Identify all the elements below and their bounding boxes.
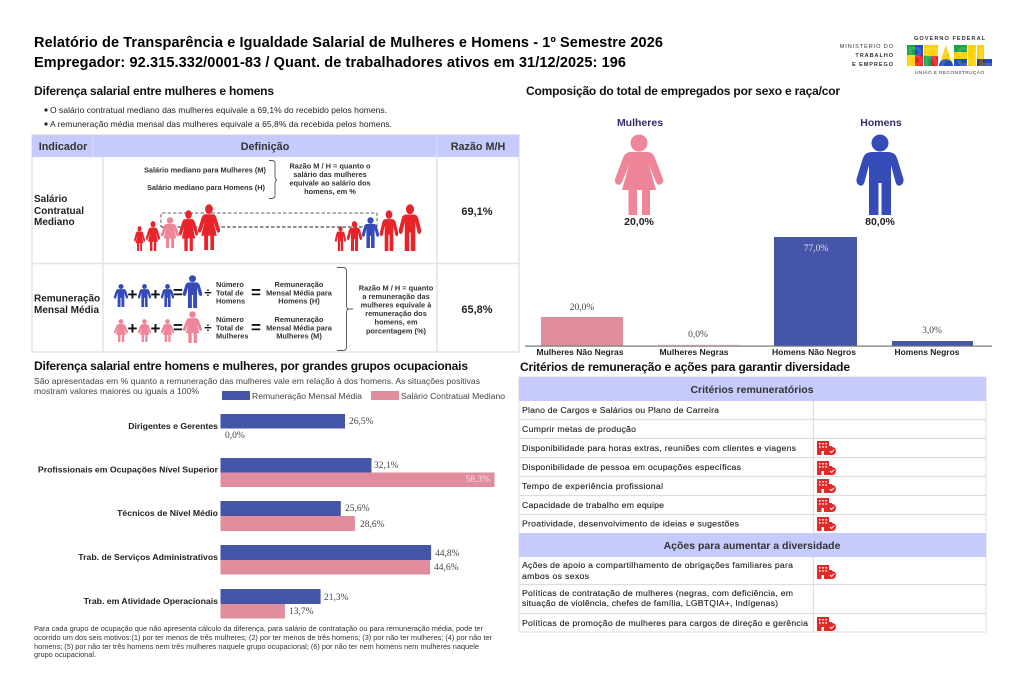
icon: mulheres: [615, 117, 663, 228]
section header: Ações para aumentar a diversidade: [664, 540, 841, 552]
dashed median box: [161, 213, 377, 227]
rows: [522, 405, 797, 528]
rows: Políticas de promoção de mulheres para cargos de direção e gerência: [522, 618, 808, 628]
bar chart: grupos ocupacionais: 25,6%: [345, 504, 370, 514]
formula: homens: Homens: [216, 296, 245, 306]
formula: homens: =: [173, 283, 183, 302]
logo: governo federal brasil: BRASIL: [907, 41, 992, 72]
formula: homens: Mensal Média para: [266, 288, 333, 298]
bar chart: composição: 0,0%: [688, 330, 708, 340]
definition: razão remuneração: homens, em: [374, 318, 418, 326]
formula: homens: =: [251, 283, 261, 302]
title: Relatório de Transparência e Igualdade Salarial de Mulheres e Homens - 1º Semestre 2026: [34, 35, 663, 51]
icon: homens: [856, 117, 904, 228]
formula: mulheres: ÷: [204, 320, 212, 335]
definition: razão remuneração: mulheres equivale à: [361, 300, 432, 310]
logo: ministry: TRABALHO: [855, 53, 894, 59]
heading: grupos ocupacionais: Diferença salarial entre homens e mulheres, por grandes grupos ocupacionais: [34, 359, 468, 373]
legend: [222, 391, 505, 401]
formula: homens: ÷: [204, 285, 212, 300]
rows: ambos os sexos: [522, 571, 590, 581]
footnote: grupo ocupacional.: [34, 650, 96, 659]
section header: Critérios remuneratórios: [690, 384, 814, 396]
footnote: homens; (5) por não ter três homens nem três mulheres naquele grupo ocupacional; (6) por não ter nem homens nem mulheres naquele: [34, 642, 479, 651]
bar chart: grupos ocupacionais: 28,6%: [360, 520, 385, 530]
formula: mulheres: Mulheres: [216, 332, 248, 340]
bar chart: grupos ocupacionais: 58,3%: [465, 475, 490, 485]
legend: Remuneração Mensal Média: [252, 391, 362, 401]
bullets: [44, 105, 392, 129]
indicator: remuneração: Remuneração: [34, 294, 100, 304]
bar chart: composição: 77,0%: [804, 244, 828, 254]
table header: Indicador: [39, 141, 88, 153]
footnote: Para cada grupo de ocupação que não apresenta cálculo da diferença, para salário de contratação ou para remuneração média, pode ter: [34, 624, 484, 633]
bullets: O salário contratual mediano das mulheres equivale a 69,1% do recebido pelos homens.: [50, 105, 387, 115]
bar chart: grupos ocupacionais: 21,3%: [324, 593, 349, 603]
bar chart: grupos ocupacionais: 44,8%: [435, 549, 460, 559]
logo: governo federal brasil: UNIÃO E RECONSTRUÇÃO: [915, 69, 985, 76]
formula: mulheres: =: [173, 318, 183, 337]
value: 65,8%: 65,8%: [461, 304, 493, 316]
indicator: salário contratual: Mediano: [34, 217, 75, 228]
definition: razão remuneração: [359, 284, 434, 336]
bar chart: composição: [525, 237, 992, 357]
definition: razão salário: salário das mulheres: [293, 170, 367, 179]
subtitle: [34, 376, 480, 396]
definition: razão salário: [289, 162, 371, 196]
rows: Plano de Cargos e Salários ou Plano de Carreira: [522, 405, 719, 415]
bar chart: grupos ocupacionais: Técnicos de Nível Médio: [117, 508, 218, 518]
icons: homens mediana: [335, 204, 421, 251]
formula: mulheres: Mensal Média para: [266, 324, 333, 332]
indicator: salário contratual: Salário: [34, 194, 67, 205]
formula: homens: Total de: [216, 288, 244, 298]
bar chart: grupos ocupacionais: [38, 414, 494, 618]
formula: mulheres: +: [128, 319, 138, 338]
title: Empregador: 92.315.332/0001-83 / Quant. de trabalhadores ativos em 31/12/2025: 196: [34, 55, 626, 71]
definition text: salário mediano: Salário mediano para Mulheres (M): [144, 166, 267, 174]
bar chart: composição: Homens Negros: [894, 347, 960, 357]
brace: [337, 268, 353, 350]
footnote: [34, 624, 493, 659]
rows: Proatividade, desenvolvimento de ideias e sugestões: [522, 518, 740, 528]
icons: building check: [817, 441, 836, 531]
icon: mulheres: 20,0%: [624, 216, 655, 228]
icons: building check: [817, 565, 836, 631]
formula: homens: +: [128, 285, 138, 304]
formula: mulheres: Total de: [216, 324, 244, 332]
formula: mulheres: Número: [216, 315, 244, 324]
heading: critérios: Critérios de remuneração e ações para garantir diversidade: [520, 360, 850, 374]
definition: razão remuneração: Razão M / H = quanto: [359, 284, 434, 292]
bar chart: grupos ocupacionais: 0,0%: [225, 431, 245, 441]
footnote: ocorrido um dos seis motivos:(1) por ter menos de três mulheres; (2) por ter menos de três homens; (3) por não ter mulheres; (4) por não ter: [34, 633, 493, 642]
rows: Cumprir metas de produção: [522, 424, 636, 434]
definition: razão remuneração: remuneração dos: [365, 309, 427, 318]
rows: Disponibilidade para horas extras, reuniões com clientes e viagens: [522, 443, 797, 453]
legend: Salário Contratual Mediano: [401, 391, 505, 401]
icon: homens: 80,0%: [865, 216, 896, 228]
brace: [269, 160, 277, 198]
indicator: remuneração: [34, 294, 100, 316]
formula: homens: Homens (H): [278, 296, 320, 306]
rows: situação de violência, chefes de família, LGBTQIA+, Indígenas): [522, 598, 778, 608]
definition text: salário mediano: [144, 166, 267, 192]
bar chart: grupos ocupacionais: Dirigentes e Gerentes: [128, 421, 218, 431]
definition: razão salário: Razão M / H = quanto o: [289, 162, 371, 170]
value: 69,1%: 69,1%: [461, 206, 493, 218]
rows: Disponibilidade de pessoa em ocupações específicas: [522, 462, 742, 472]
icon: mulheres: Mulheres: [617, 117, 663, 129]
logo: governo federal brasil: [907, 36, 992, 76]
bar chart: composição: Mulheres Negras: [660, 347, 729, 357]
indicator: salário contratual: Contratual: [34, 206, 84, 217]
rows: [522, 560, 808, 628]
title: [34, 35, 663, 71]
icons: mulheres mediana: [134, 204, 220, 251]
table header: Definição: [241, 141, 290, 153]
definition: razão salário: homens, em %: [304, 187, 356, 196]
formula: mulheres: Mulheres (M): [276, 332, 322, 340]
logo: ministry: E EMPREGO: [852, 62, 894, 68]
rows: Tempo de experiência profissional: [522, 481, 663, 491]
heading: composição: Composição do total de empregados por sexo e raça/cor: [526, 84, 840, 98]
formula: mulheres: Remuneração: [275, 315, 324, 324]
bar chart: grupos ocupacionais: Trab. de Serviços Administrativos: [78, 552, 218, 562]
rows: Ações de apoio a compartilhamento de obrigações familiares para: [522, 560, 793, 570]
formula: homens: [114, 275, 333, 308]
bar chart: grupos ocupacionais: 32,1%: [374, 461, 399, 471]
logo: governo federal brasil: GOVERNO FEDERAL: [914, 36, 986, 42]
subtitle: mostram valores maiores ou iguais a 100%: [34, 386, 199, 396]
definition: razão salário: equivale ao salário dos: [289, 178, 371, 188]
heading: diferença salarial: Diferença salarial entre mulheres e homens: [34, 84, 274, 98]
logo: ministry: MINISTÉRIO DO: [840, 43, 894, 50]
formula: mulheres: [114, 311, 333, 343]
indicator: salário contratual: [34, 194, 84, 228]
bullets: A remuneração média mensal das mulheres equivale a 65,8% da recebida pelos homens.: [50, 119, 392, 129]
definition: razão remuneração: porcentagem (%): [366, 326, 427, 336]
rows: Capacidade de trabalho em equipe: [522, 500, 664, 510]
bar chart: composição: 20,0%: [570, 303, 594, 313]
formula: homens: Número: [216, 280, 244, 289]
definition text: salário mediano: Salário mediano para Homens (H): [147, 183, 266, 192]
table header: [32, 135, 519, 157]
rows: Políticas de contratação de mulheres (negras, com deficiência, em: [522, 588, 793, 598]
bar chart: composição: Homens Não Negros: [772, 347, 856, 357]
definition: razão remuneração: a remuneração das: [362, 292, 430, 301]
bar chart: grupos ocupacionais: 26,5%: [349, 417, 374, 427]
formula: mulheres: +: [151, 319, 161, 338]
formula: homens: Remuneração: [275, 280, 324, 289]
icon: homens: Homens: [860, 117, 902, 129]
bar chart: grupos ocupacionais: Profissionais em Ocupações Nível Superior: [38, 464, 219, 474]
bar chart: composição: 3,0%: [922, 326, 942, 336]
formula: homens: +: [151, 285, 161, 304]
bar chart: grupos ocupacionais: Trab. em Atividade Operacionais: [84, 596, 218, 606]
indicator: remuneração: Mensal Média: [34, 305, 99, 316]
subtitle: São apresentadas em % quanto a remuneração das mulheres vale em relação à dos homens. As situações positivas: [34, 376, 480, 386]
bar chart: grupos ocupacionais: 44,6%: [434, 563, 459, 573]
table header: Razão M/H: [451, 141, 505, 153]
panel: critérios remuneratórios e ações: [519, 377, 986, 632]
formula: mulheres: =: [251, 318, 261, 337]
panel: tabela indicadores: [32, 135, 519, 352]
bar chart: grupos ocupacionais: 13,7%: [289, 607, 314, 617]
bar chart: composição: Mulheres Não Negras: [536, 347, 624, 357]
logo: ministry: [840, 43, 894, 68]
